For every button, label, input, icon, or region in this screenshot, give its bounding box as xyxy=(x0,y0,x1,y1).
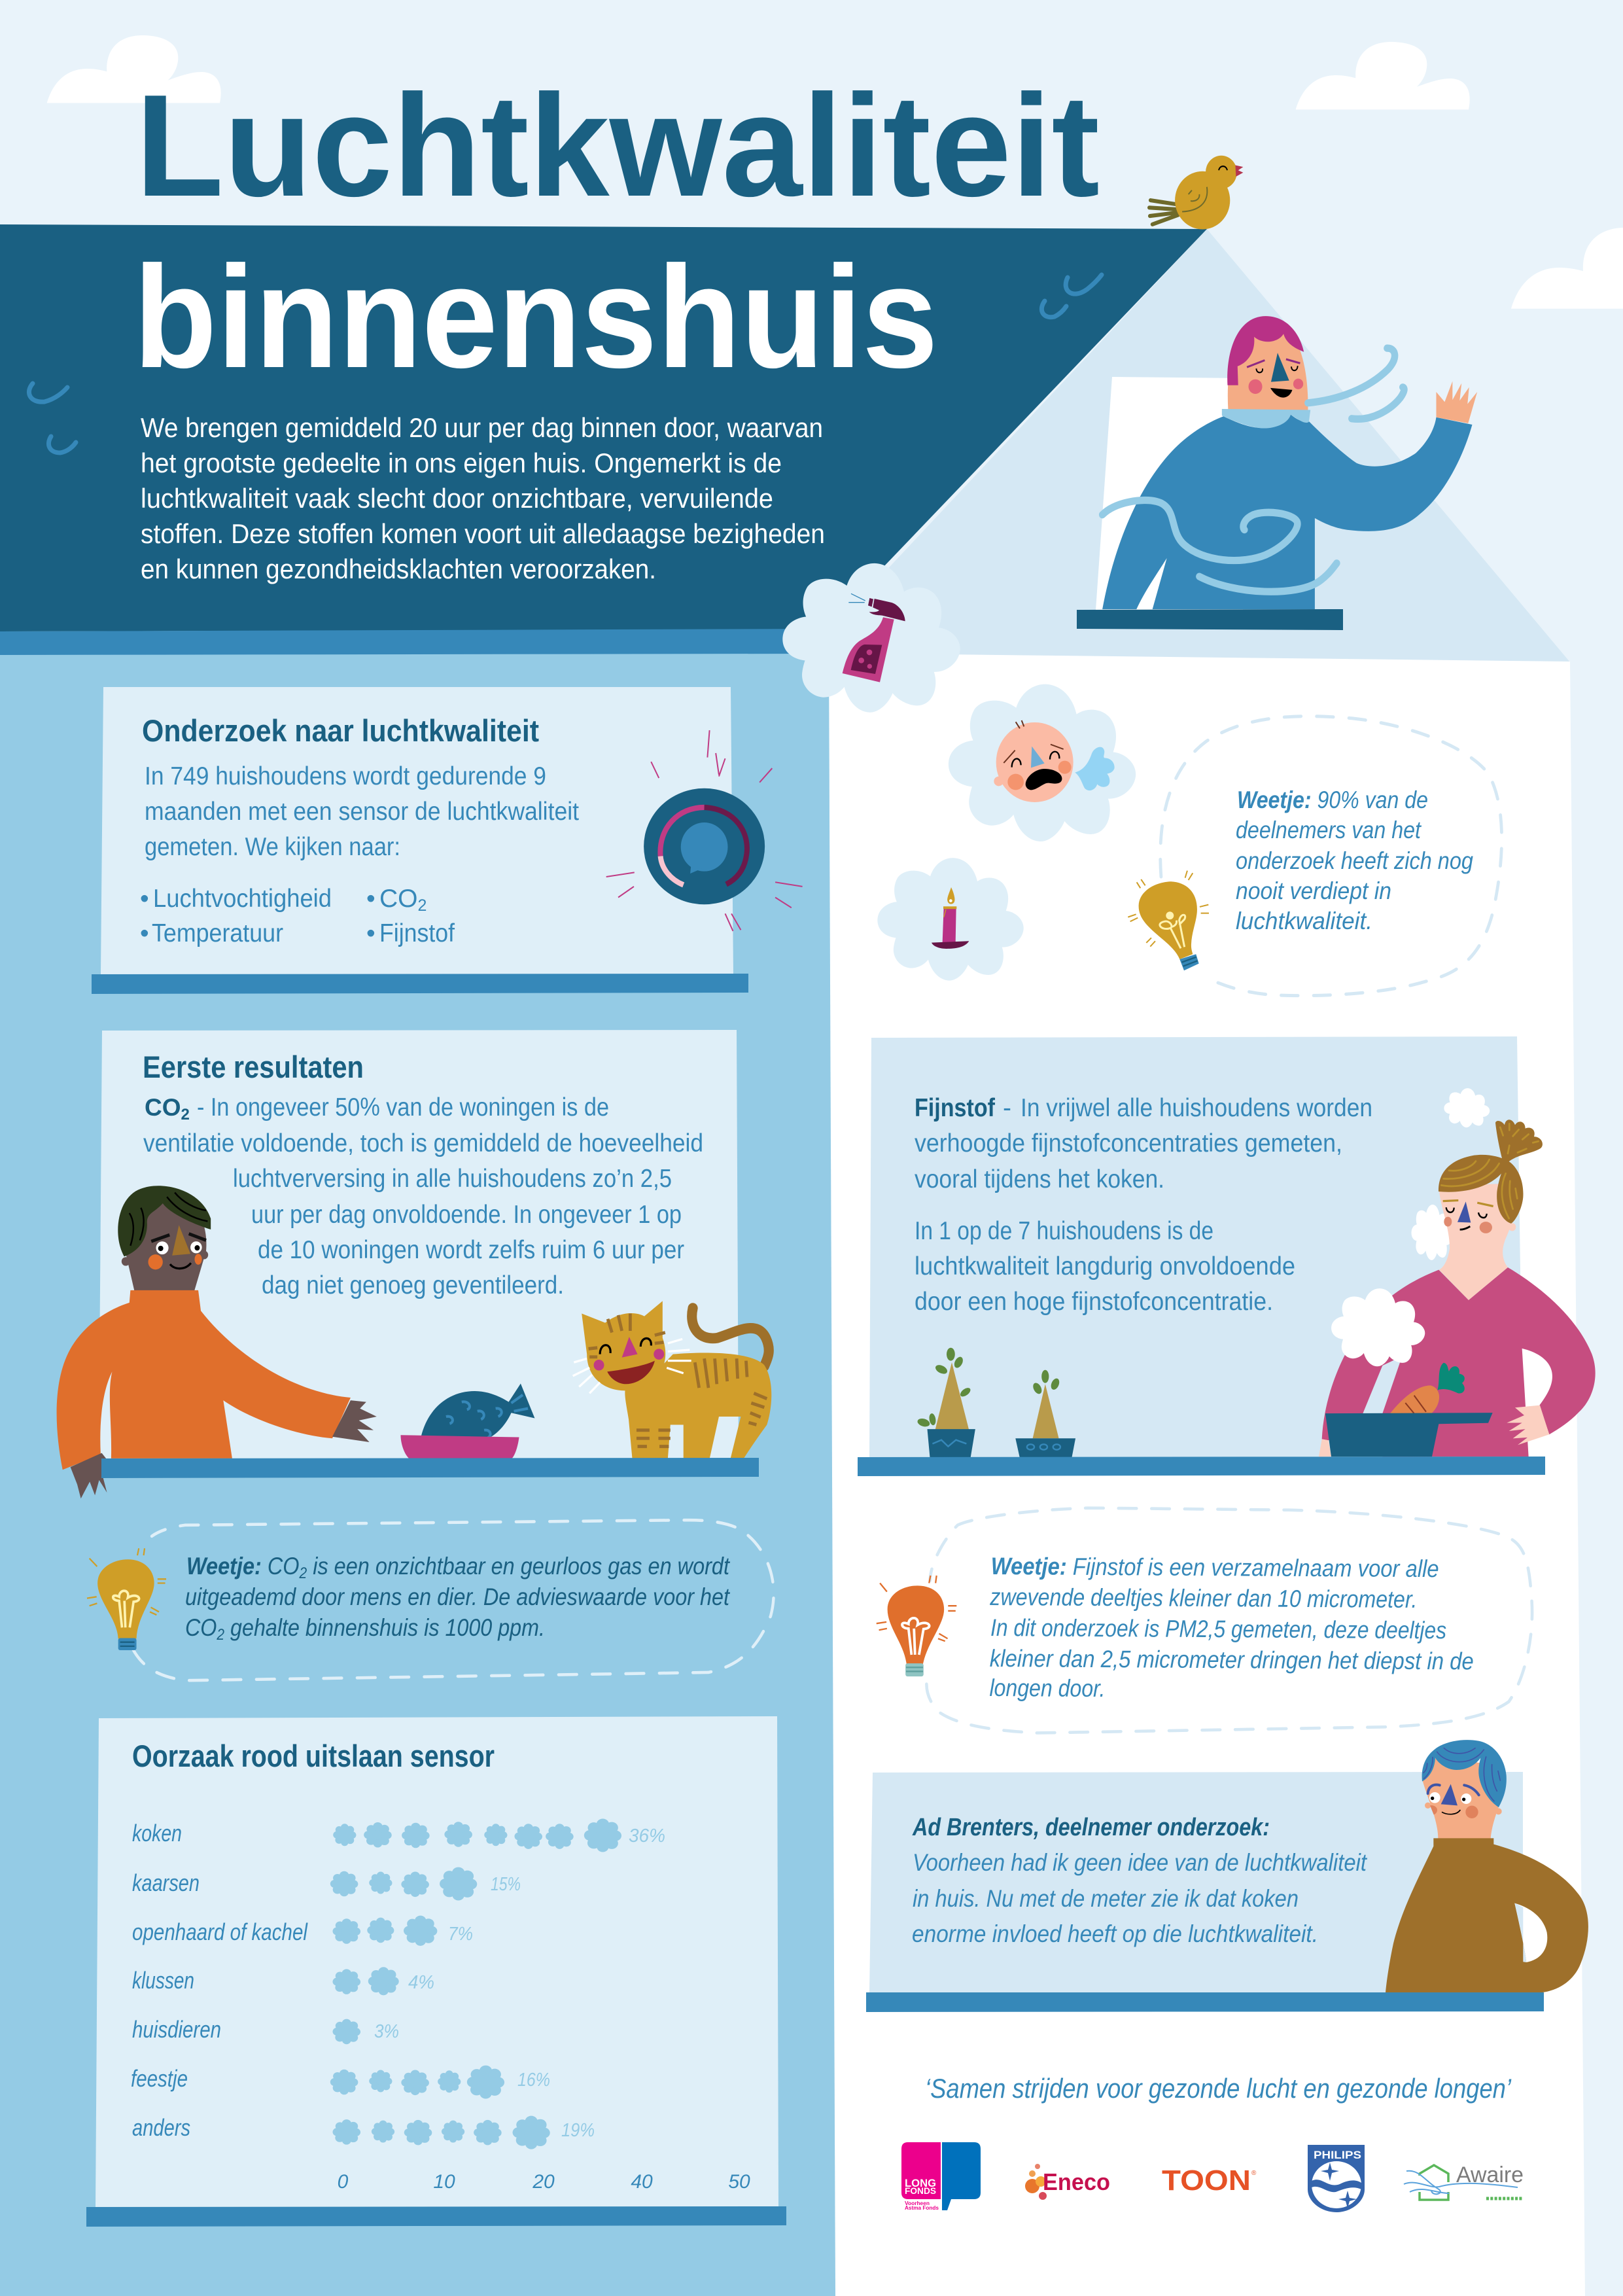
chart clouds xyxy=(330,1819,621,2149)
text: weetje fijnstof: In dit onderzoek is PM2,5 gemeten, deze deeltjes xyxy=(990,1614,1446,1644)
shelf xyxy=(858,1457,1545,1476)
text: fijnstof: luchtkwaliteit langdurig onvoldoende xyxy=(915,1252,1295,1280)
chart percentages: 7% xyxy=(448,1924,473,1945)
header band: blue strip xyxy=(0,629,826,655)
logo: Toon: ® xyxy=(1251,2170,1257,2177)
panel: fijnstof xyxy=(869,1036,1523,1457)
intro text: stoffen. Deze stoffen komen voort uit alledaagse bezigheden xyxy=(141,518,825,549)
title: binnenshuis xyxy=(133,236,938,398)
text: weetje 90%: deelnemers van het xyxy=(1236,817,1422,843)
body text: onderzoek xyxy=(145,762,579,861)
text: weetje 90% xyxy=(1236,786,1473,934)
shelf xyxy=(101,1458,759,1478)
bullet list: • xyxy=(140,919,149,947)
heading: eerste resultaten: Eerste resultaten xyxy=(143,1050,364,1084)
bullet list: Fijnstof xyxy=(379,919,455,947)
heading: oorzaak: Oorzaak rood uitslaan sensor xyxy=(132,1739,495,1773)
chart percentages: 16% xyxy=(517,2070,550,2091)
chart axis xyxy=(338,2171,750,2193)
body text: CO2 results: dag niet genoeg geventileerd. xyxy=(262,1271,564,1299)
text: fijnstof: In 1 op de 7 huishoudens is de xyxy=(915,1217,1213,1245)
logo: Eneco xyxy=(1025,2164,1110,2200)
chart labels: anders xyxy=(132,2114,190,2141)
logo: Toon: TOON xyxy=(1162,2164,1251,2197)
text: weetje 90%: luchtkwaliteit. xyxy=(1236,908,1372,934)
text: weetje fijnstof: longen door. xyxy=(989,1674,1106,1702)
shelf xyxy=(866,1992,1544,2012)
title xyxy=(133,65,1100,398)
roof: light attic triangle xyxy=(829,229,1570,662)
callout: weetje 90% xyxy=(1161,716,1502,996)
text: weetje CO2: Weetje: CO xyxy=(186,1553,305,1580)
body text: onderzoek: maanden met een sensor de luchtkwaliteit xyxy=(145,798,579,826)
heading: onderzoek: Onderzoek naar luchtkwaliteit xyxy=(142,713,539,748)
body text: CO2 results: luchtverversing in alle huishoudens zo’n 2,5 xyxy=(233,1165,672,1193)
bullet list: Luchtvochtigheid xyxy=(153,885,332,913)
intro text: het grootste gedeelte in ons eigen huis. Ongemerkt is de xyxy=(141,448,782,478)
chart axis: 10 xyxy=(433,2171,455,2193)
chart axis: 20 xyxy=(532,2171,555,2193)
text: weetje CO2: is een onzichtbaar en geurloos gas en wordt xyxy=(307,1553,731,1580)
logo: Eneco: Eneco xyxy=(1043,2168,1110,2195)
cloud with candle xyxy=(877,858,1024,981)
chart percentages: 36% xyxy=(629,1826,665,1846)
text: fijnstof: verhoogde fijnstofconcentraties gemeten, xyxy=(915,1129,1342,1157)
text: weetje fijnstof: Weetje: Fijnstof is een verzamelnaam voor alle xyxy=(991,1553,1439,1582)
icon: plants xyxy=(916,1348,1075,1457)
intro text: luchtkwaliteit vaak slecht door onzichtbare, vervuilende xyxy=(141,483,773,514)
callout: weetje fijnstof xyxy=(926,1508,1532,1733)
text: Ad Brenters: Ad Brenters, deelnemer onderzoek: xyxy=(912,1814,1270,1841)
chart labels: huisdieren xyxy=(132,2016,221,2043)
chart percentages: 4% xyxy=(408,1972,434,1993)
bullet list: Temperatuur xyxy=(152,919,283,947)
header band: dark roof xyxy=(0,224,1207,631)
logo: Longfonds: LONG xyxy=(905,2177,936,2189)
text: weetje 90%: nooit verdiept in xyxy=(1236,877,1391,904)
panel: onderzoek naar luchtkwaliteit xyxy=(101,687,733,974)
bullet list xyxy=(140,885,455,947)
chart percentages: 15% xyxy=(491,1874,521,1895)
text: fijnstof xyxy=(915,1094,1372,1316)
chart axis: 40 xyxy=(631,2171,653,2193)
character: Ad Brenters xyxy=(1386,1740,1588,1992)
icon: air quality sensor xyxy=(606,730,803,931)
text: fijnstof: door een hoge fijnstofconcentratie. xyxy=(915,1288,1273,1316)
body text: CO2 results: uur per dag onvoldoende. In ongeveer 1 op xyxy=(251,1201,682,1229)
body text: onderzoek: In 749 huishoudens wordt gedurende 9 xyxy=(145,762,546,790)
chart labels: feestje xyxy=(131,2065,188,2092)
bullet list: CO xyxy=(379,885,417,913)
intro text: We brengen gemiddeld 20 uur per dag binnen door, waarvan xyxy=(141,412,823,443)
icon: yellow light bulb xyxy=(87,1548,166,1650)
body text: CO2 results: ventilatie voldoende, toch is gemiddeld de hoeveelheid xyxy=(143,1129,703,1157)
text: weetje CO2: gehalte binnenshuis is 1000 ppm. xyxy=(224,1614,545,1641)
house: white right wall xyxy=(829,653,1585,2296)
panel: eerste resultaten xyxy=(99,1030,739,1460)
panel: quote Ad Brenters xyxy=(869,1772,1523,1992)
text: fijnstof: In vrijwel alle huishoudens worden xyxy=(1021,1094,1372,1122)
shelf xyxy=(92,974,748,994)
sky clouds xyxy=(47,35,1623,309)
wind swooshes on roof xyxy=(29,275,1102,453)
logo: Longfonds: Astma Fonds xyxy=(905,2205,939,2211)
text: weetje fijnstof: zwevende deeltjes kleiner dan 10 micrometer. xyxy=(989,1583,1417,1613)
text: Ad Brenters: enorme invloed heeft op die luchtkwaliteit. xyxy=(912,1920,1318,1947)
chart axis: 50 xyxy=(728,2171,750,2193)
text: fijnstof: - xyxy=(1003,1094,1011,1122)
text: weetje fijnstof xyxy=(989,1553,1475,1704)
logo: Philips xyxy=(1308,2145,1365,2212)
character: woman in window with wind xyxy=(1102,316,1477,609)
slogan: ‘Samen strijden voor gezonde lucht en gezonde longen’ xyxy=(925,2073,1512,2104)
logo: Philips: PHILIPS xyxy=(1314,2149,1361,2161)
window sill xyxy=(1077,609,1343,630)
text: weetje 90%: Weetje: 90% van de xyxy=(1237,786,1428,813)
window xyxy=(1096,377,1243,610)
house: blue left wall xyxy=(0,653,835,2296)
cloud with spray bottle xyxy=(782,563,960,713)
icon: light bulb tilted xyxy=(1128,871,1209,970)
shelf xyxy=(86,2206,786,2227)
icon: orange light bulb xyxy=(877,1576,956,1676)
bullet list: • xyxy=(366,919,375,947)
bullet list: • xyxy=(140,885,149,913)
body text: CO2 results: de 10 woningen wordt zelfs ruim 6 uur per xyxy=(258,1236,684,1264)
text: fijnstof: vooral tijdens het koken. xyxy=(915,1165,1164,1193)
intro text: en kunnen gezondheidsklachten veroorzaken. xyxy=(141,554,656,584)
icon: bird on roof xyxy=(1149,156,1243,230)
chart percentages: 19% xyxy=(561,2120,595,2141)
chart labels xyxy=(131,1820,308,2141)
body text: CO2 results: - In ongeveer 50% van de woningen is de xyxy=(197,1093,609,1122)
body text: CO2 results: CO xyxy=(145,1094,181,1121)
logo: Longfonds xyxy=(901,2142,981,2211)
text: fijnstof: Fijnstof xyxy=(915,1094,996,1122)
chart percentages xyxy=(374,1826,665,2141)
chart percentages: 3% xyxy=(374,2021,399,2042)
chart labels: klussen xyxy=(132,1967,194,1994)
text: weetje fijnstof: kleiner dan 2,5 micrometer dringen het diepst in de xyxy=(990,1645,1474,1675)
text: weetje CO2: CO xyxy=(185,1614,221,1641)
character: woman cooking xyxy=(1319,1088,1596,1457)
bullet list: • xyxy=(366,885,375,913)
text: Ad Brenters: in huis. Nu met de meter zie ik dat koken xyxy=(913,1885,1299,1912)
text: weetje 90%: onderzoek heeft zich nog xyxy=(1236,847,1473,874)
logo: Awaire xyxy=(1404,2163,1524,2200)
chart labels: koken xyxy=(132,1820,182,1846)
chart axis: 0 xyxy=(338,2171,349,2193)
logo: Longfonds: Voorheen xyxy=(905,2200,930,2206)
body text: CO2 results: 2 xyxy=(181,1106,190,1123)
character: man feeding cat xyxy=(57,1186,377,1498)
text: weetje CO2 xyxy=(185,1553,731,1644)
text: weetje CO2: 2 xyxy=(217,1626,224,1644)
chart labels: kaarsen xyxy=(132,1869,200,1896)
body text: CO2 results xyxy=(143,1093,703,1299)
text: Ad Brenters: Voorheen had ik geen idee van de luchtkwaliteit xyxy=(913,1849,1368,1876)
logo: Awaire: Awaire xyxy=(1456,2163,1524,2187)
text: weetje CO2: uitgeademd door mens en dier. De advieswaarde voor het xyxy=(185,1583,730,1610)
chart labels: openhaard of kachel xyxy=(132,1918,308,1945)
icon: fish in bowl xyxy=(400,1383,534,1459)
intro text xyxy=(141,412,825,584)
text: Ad Brenters xyxy=(912,1814,1368,1947)
body text: onderzoek: gemeten. We kijken naar: xyxy=(145,833,400,861)
panel: bar chart oorzaak rood uitslaan sensor xyxy=(96,1716,778,2207)
text: weetje CO2: 2 xyxy=(299,1564,307,1582)
icon: cat xyxy=(573,1301,771,1459)
cloud with baby xyxy=(949,684,1136,841)
logo: Longfonds: FONDS xyxy=(905,2185,936,2196)
bullet list: 2 xyxy=(417,896,427,915)
callout: weetje CO2 xyxy=(133,1520,774,1680)
title: Luchtkwaliteit xyxy=(135,65,1100,227)
